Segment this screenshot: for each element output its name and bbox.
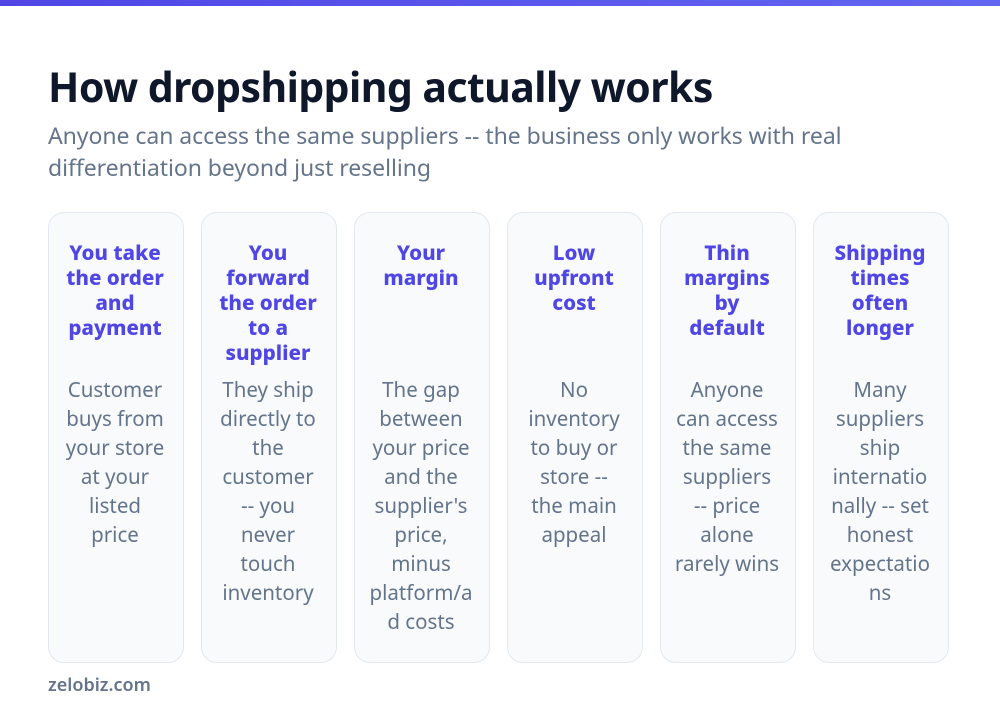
heading: margin (383, 264, 459, 292)
panel: thin margins by default (660, 212, 796, 663)
text block: -- price (694, 492, 760, 520)
subtitle: Anyone can access the same suppliers -- the business only works with real (48, 119, 842, 151)
heading: and (95, 289, 135, 317)
heading: supplier (226, 339, 310, 367)
text block: the same (682, 434, 772, 462)
text block: d costs (387, 608, 455, 636)
title: How dropshipping actually works (48, 59, 713, 115)
text block: ship (860, 434, 900, 462)
heading: to a (248, 314, 288, 342)
text block: can access (676, 405, 778, 433)
text block: inventory (222, 579, 314, 607)
heading (66, 239, 164, 342)
text block: directly to (220, 405, 316, 433)
text block: your price (372, 434, 470, 462)
heading: often (852, 289, 908, 317)
text block: never (241, 521, 295, 549)
text block: expectatio (830, 550, 930, 578)
heading: Shipping (835, 239, 925, 267)
heading: You take (69, 239, 161, 267)
text block (369, 376, 472, 636)
text block: Many (853, 376, 907, 404)
heading: Thin (704, 239, 750, 267)
heading (219, 239, 317, 367)
text block: your store (66, 434, 164, 462)
text block: honest (847, 521, 913, 549)
top accent bar (0, 0, 1000, 6)
text block: to buy or (530, 434, 618, 462)
text block (528, 376, 620, 549)
heading: longer (846, 314, 914, 342)
text block: internatio (833, 463, 927, 491)
text block: buys from (66, 405, 164, 433)
text block: suppliers (836, 405, 924, 433)
text block: Customer (68, 376, 162, 404)
text block: price, (394, 521, 448, 549)
heading: cost (552, 289, 596, 317)
text block: price (91, 521, 139, 549)
text block (830, 376, 930, 607)
heading: the order (66, 264, 164, 292)
heading: times (851, 264, 909, 292)
text block: ns (869, 579, 891, 607)
text block: They ship (222, 376, 314, 404)
text block: -- you (241, 492, 295, 520)
text block: suppliers (683, 463, 771, 491)
heading: by (715, 289, 739, 317)
text block: Anyone (691, 376, 763, 404)
text block: alone (700, 521, 754, 549)
heading: the order (219, 289, 317, 317)
text block: nally -- set (831, 492, 929, 520)
text block: minus (391, 550, 451, 578)
heading: forward (226, 264, 310, 292)
text block (66, 376, 164, 549)
text block: appeal (541, 521, 607, 549)
text block: store -- (540, 463, 608, 491)
text block: customer (222, 463, 314, 491)
footer brand: zelobiz.com (48, 673, 151, 697)
heading: You (249, 239, 287, 267)
heading (684, 239, 770, 342)
heading: Your (397, 239, 445, 267)
text block: inventory (528, 405, 620, 433)
heading (534, 239, 614, 317)
text block: listed (89, 492, 141, 520)
text block: at your (81, 463, 149, 491)
panel: you forward the order to a supplier (201, 212, 337, 663)
text block: the main (531, 492, 617, 520)
heading: Low (553, 239, 595, 267)
heading: margins (684, 264, 770, 292)
text block: touch (240, 550, 295, 578)
panel: shipping times often longer (813, 212, 949, 663)
heading: upfront (534, 264, 614, 292)
heading (383, 239, 459, 292)
text block: rarely wins (675, 550, 779, 578)
heading: payment (68, 314, 162, 342)
heading (835, 239, 925, 342)
text block: platform/a (369, 579, 472, 607)
panel: low upfront cost (507, 212, 643, 663)
text block (220, 376, 316, 607)
text block: and the (384, 463, 458, 491)
subtitle: differentiation beyond just reselling (48, 151, 431, 183)
subtitle (48, 119, 842, 183)
text block: supplier's (375, 492, 467, 520)
text block: the (252, 434, 284, 462)
panel: you take the order and payment (48, 212, 184, 663)
heading: default (689, 314, 765, 342)
text block: No (560, 376, 588, 404)
text block (675, 376, 779, 578)
text block: between (379, 405, 463, 433)
panel: your margin (354, 212, 490, 663)
text block: The gap (382, 376, 460, 404)
